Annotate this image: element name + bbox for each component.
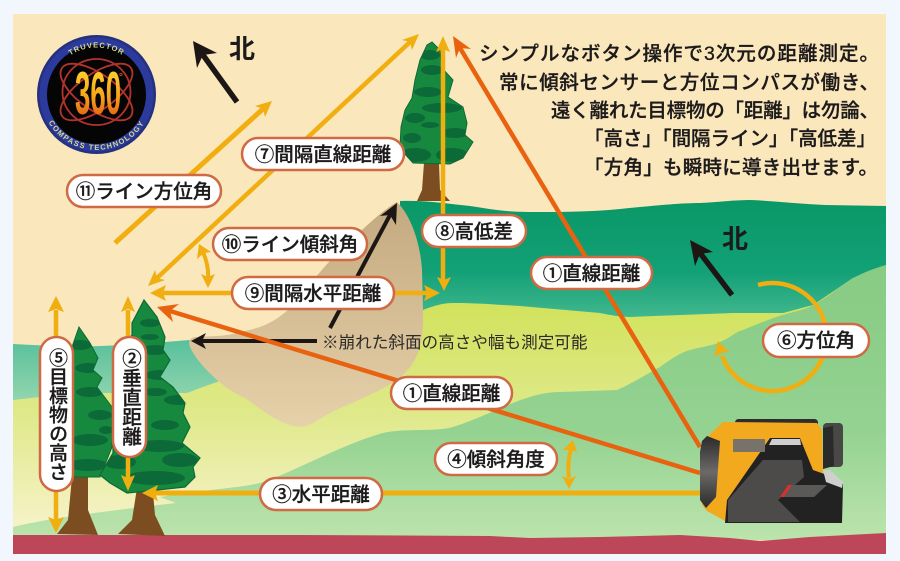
logo: 360 compass technology badge: ° <box>119 72 123 83</box>
arrow: target height <box>48 296 64 533</box>
arrow: line bearing <box>115 101 272 243</box>
arrow: interval horizontal distance <box>150 285 440 301</box>
label: straight distance lower <box>391 377 512 409</box>
label: target height <box>40 337 73 491</box>
description text block: 常に傾斜センサーと方位コンパスが働き、 <box>499 72 879 94</box>
label: azimuth <box>763 324 869 357</box>
arrow: elevation difference <box>436 36 451 291</box>
arrow: straight distance to near tree <box>157 304 700 473</box>
description text block: シンプルなボタン操作で3次元の距離測定。 <box>479 43 879 65</box>
arrow: line inclination angle <box>197 244 215 288</box>
north arrow upper <box>193 41 237 102</box>
label: line inclination angle <box>213 228 367 260</box>
logo: 360 compass technology badge: COMPASS TECHNOLOGY <box>49 120 143 150</box>
label: inclination angle: ④傾斜角度 <box>447 449 545 471</box>
label: interval horizontal distance <box>232 277 394 309</box>
arrow: slope scan line <box>330 203 397 328</box>
label: interval straight distance <box>242 138 404 170</box>
description text block: 「高さ」「間隔ライン」「高低差」 <box>584 128 876 150</box>
north label upper: 北 <box>229 34 255 64</box>
arrow: horizontal distance <box>142 485 700 501</box>
arrow: slope width line <box>191 333 317 349</box>
label: elevation difference: ⑧高低差 <box>435 221 513 243</box>
arrow: inclination angle <box>562 440 577 489</box>
north arrow lower <box>690 240 732 295</box>
note: slope measurement: ※崩れた斜面の高さや幅も測定可能 <box>322 333 588 352</box>
description text block: 「方角」も瞬時に導き出せます。 <box>584 157 878 179</box>
description text block: 遠く離れた目標物の「距離」は勿論、 <box>551 100 879 122</box>
label: elevation difference <box>422 215 526 247</box>
tree: left back <box>57 327 113 535</box>
arrow: vertical distance <box>121 296 135 491</box>
near green hill <box>13 265 886 540</box>
rangefinder device <box>700 419 843 523</box>
teal hill left <box>13 340 260 402</box>
label: straight distance lower: ①直線距離 <box>403 383 500 405</box>
label: horizontal distance: ③水平距離 <box>272 484 370 506</box>
far teal hill right <box>400 200 886 330</box>
arrow: straight distance to hilltop <box>453 36 700 447</box>
logo: 360 compass technology badge <box>37 35 156 154</box>
yellow-green hill <box>13 265 886 535</box>
label: vertical distance: ②垂直距離 <box>118 348 141 446</box>
label: horizontal distance <box>260 478 382 510</box>
label: vertical distance <box>113 337 146 457</box>
label: straight distance upper: ①直線距離 <box>543 263 640 285</box>
label: interval horizontal distance: ⑨間隔水平距離 <box>245 283 381 305</box>
tree: hilltop <box>399 42 473 201</box>
tree: left front <box>100 300 200 536</box>
label: target height: ⑤目標物の高さ <box>46 348 68 481</box>
label: line bearing: ⑪ライン方位角 <box>76 181 212 203</box>
label: azimuth: ⑥方位角 <box>777 330 855 352</box>
eroded sand slope <box>189 202 423 427</box>
label: line bearing <box>67 175 221 207</box>
north label lower: 北 <box>722 224 748 254</box>
logo: 360 compass technology badge: 360 <box>75 60 121 127</box>
label: line inclination angle: ⑩ライン傾斜角 <box>222 234 358 256</box>
label: inclination angle <box>435 443 557 475</box>
logo: 360 compass technology badge: TRUVECTOR <box>68 42 124 55</box>
description text block <box>479 43 879 179</box>
arrow: interval straight distance <box>148 34 419 286</box>
arrow: azimuth circle <box>714 283 827 391</box>
red ground band <box>13 533 886 554</box>
label: straight distance upper <box>531 257 652 289</box>
label: interval straight distance: ⑦間隔直線距離 <box>255 144 391 166</box>
